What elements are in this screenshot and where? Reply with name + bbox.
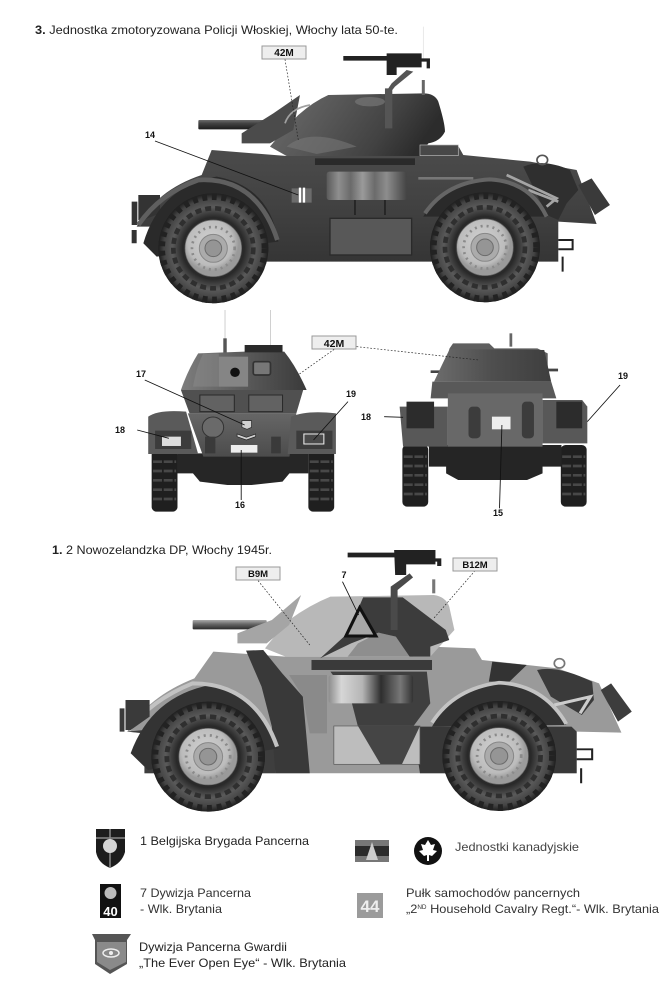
stowage ring [537, 155, 548, 165]
label box 42M [262, 46, 306, 59]
fuel tank [329, 675, 413, 703]
left fender [400, 407, 448, 447]
gun mantlet [242, 95, 300, 143]
legend: 7th Armoured Division: - Wlk. Brytania [140, 902, 222, 916]
legend: Belgian brigade: 1 Belgijska Brygada Pancerna [140, 834, 309, 848]
gun barrel [198, 120, 270, 129]
tank straps [355, 200, 385, 215]
axles and underside [177, 453, 308, 485]
tyre left [152, 450, 177, 512]
boxes [407, 402, 434, 428]
view numbers: 19 [346, 389, 356, 399]
subtitle: New Zealand division: 1. 2 Nowozelandzka DP, Włochy 1945r. [52, 543, 272, 557]
mantlet strap [285, 105, 310, 123]
rear strap [507, 175, 558, 207]
antenna base [220, 338, 230, 353]
turret [270, 93, 445, 156]
icon: badge 44: 44 [361, 897, 380, 916]
machine gun [343, 53, 430, 75]
camo lower right [413, 727, 577, 773]
rear post [419, 80, 428, 95]
antenna line [422, 27, 424, 62]
icon: maple leaf roundel [414, 837, 442, 865]
icon: Belgian shield [96, 829, 125, 868]
vehicle: side view, dark scheme [132, 27, 610, 303]
tyre right [561, 445, 587, 507]
light side panel [289, 675, 327, 733]
tyres [402, 445, 428, 507]
rear wheel [430, 192, 540, 302]
right recess [296, 431, 332, 449]
left recess [155, 431, 191, 449]
underside [429, 445, 561, 480]
side pins [431, 370, 558, 372]
turret highlights [287, 137, 357, 154]
label box B9M: B9M [248, 569, 268, 580]
jerry can [578, 178, 610, 215]
rear handle [558, 240, 573, 272]
right fender [543, 400, 587, 443]
camo band front [246, 650, 310, 773]
rear post [429, 579, 438, 593]
mantlet [219, 357, 248, 387]
legend: 2nd Household Cavalry: ND [417, 905, 427, 911]
police marks [292, 188, 312, 203]
rear wheel well [432, 683, 566, 727]
engine deck [431, 382, 556, 398]
rear stowage [523, 163, 578, 220]
left fender [148, 411, 198, 454]
view numbers: 18 [115, 425, 125, 435]
cans [469, 407, 481, 438]
right can [522, 402, 534, 438]
legend: 2nd Household Cavalry: Household Cavalry Regt.“- Wlk. Brytania [427, 902, 659, 916]
camo centre [330, 672, 430, 727]
white stripes [300, 188, 304, 203]
label box B12M: B12M [462, 560, 488, 571]
turret [434, 349, 551, 382]
legend: Canadian units [355, 837, 579, 865]
vision port [253, 362, 270, 375]
front wheel well [143, 177, 278, 257]
gun barrel [193, 620, 267, 629]
leader lines [137, 380, 348, 500]
view numbers: 16 [235, 500, 245, 510]
legend: 2nd Household Cavalry: Pułk samochodów pancernych [406, 886, 580, 900]
gun muzzle [230, 368, 240, 377]
legend: Guards Armoured Division [92, 934, 346, 974]
turret top [444, 343, 548, 367]
front fender [129, 683, 277, 747]
legend: Guards Armoured Division: „The Ever Open Eye“ - Wlk. Brytania [139, 956, 346, 970]
vehicle: front view [137, 310, 348, 512]
turret shadow [193, 353, 219, 387]
front stowage box [132, 195, 160, 243]
aerial [507, 333, 515, 347]
view numbers: 17 [136, 369, 146, 379]
title: Italian police unit: 3. Jednostka zmotoryzowana Policji Włoskiej, Włochy lata 50-te. [35, 23, 398, 37]
rear wheel [442, 701, 556, 811]
right fender [288, 412, 336, 454]
legend: 2nd Household Cavalry: „2 [406, 902, 417, 916]
legend: 2nd Household Cavalry [357, 886, 659, 918]
label box B9M [236, 567, 280, 580]
left plate [162, 437, 181, 446]
side lamps [205, 437, 281, 453]
label box 42M: 42M [324, 338, 344, 350]
leader 7 [342, 582, 359, 615]
dotted leader [357, 347, 479, 360]
hull [127, 647, 621, 773]
vehicle: rear view [357, 333, 620, 508]
headlight [202, 417, 224, 438]
antennas [225, 310, 270, 347]
hull [137, 145, 597, 262]
icon: badge 40: 40 [103, 904, 118, 919]
front box [120, 700, 150, 732]
machine gun [348, 550, 441, 575]
view numbers [115, 369, 628, 518]
legend: Belgian brigade [96, 829, 309, 868]
dotted leaders [258, 571, 475, 645]
hull rail [315, 158, 415, 165]
hull rail [311, 660, 432, 670]
rear wheel well [423, 178, 548, 217]
fuel tank [327, 172, 407, 200]
front hull [188, 413, 296, 457]
right marking [304, 434, 324, 444]
label box B12M [453, 558, 497, 571]
vehicle: side view, camouflage [120, 550, 632, 812]
tyre right [308, 450, 334, 512]
stowage ring [554, 659, 565, 668]
rear handle [577, 749, 592, 783]
front wheel [151, 702, 265, 812]
number 14: 14 [145, 130, 155, 140]
icon: badge 44 [357, 893, 383, 918]
top hatch [245, 345, 283, 352]
front fender [138, 180, 277, 240]
view numbers: 19 [618, 371, 628, 381]
rear strap [554, 697, 590, 713]
camo lower left [127, 727, 275, 773]
front wheel [158, 193, 268, 303]
icon: badge 40 [100, 884, 121, 919]
number plate [492, 417, 511, 429]
turret top highlight [355, 97, 385, 106]
side box [334, 726, 420, 764]
rear plate [448, 393, 543, 447]
rear dark patch [489, 662, 527, 682]
exhaust pipe [418, 174, 473, 182]
side box [330, 218, 412, 255]
leader lines [384, 385, 620, 508]
gun post [385, 70, 413, 128]
label box 42M [312, 336, 356, 350]
number plate [231, 445, 257, 453]
legend: Guards Armoured Division: Dywizja Pancerna Gwardii [139, 940, 287, 954]
view numbers: 15 [493, 508, 503, 518]
front wheel well [131, 685, 279, 770]
turret [181, 352, 307, 390]
upper hull [181, 390, 303, 413]
camo turret band [320, 597, 449, 658]
box camo [358, 726, 420, 764]
hatches [200, 395, 283, 412]
rear fender [432, 683, 566, 724]
legend: 7th Armoured Division: 7 Dywizja Pancerna [140, 886, 251, 900]
view numbers: 18 [361, 412, 371, 422]
leader 14 [155, 141, 298, 195]
icon: Canadian flag patch [355, 840, 389, 862]
turret mid tone [348, 633, 413, 657]
rear fender [425, 179, 547, 217]
turret [265, 595, 454, 657]
dotted leader [298, 349, 334, 375]
dotted leader [285, 59, 298, 140]
right box [556, 402, 582, 428]
unit emblem [237, 421, 256, 440]
gun post [391, 573, 413, 630]
legend: 7th Armoured Division [100, 884, 251, 919]
rear stowage [537, 669, 594, 715]
formation triangle [346, 608, 376, 636]
jerry can [601, 683, 632, 722]
gun mantlet [237, 595, 301, 643]
legend: Canadian units: Jednostki kanadyjskie [455, 840, 579, 854]
engine deck [420, 145, 458, 156]
number 7: 7 [341, 570, 347, 580]
icon: Guards shield [92, 934, 131, 974]
label box 42M: 42M [274, 48, 294, 59]
